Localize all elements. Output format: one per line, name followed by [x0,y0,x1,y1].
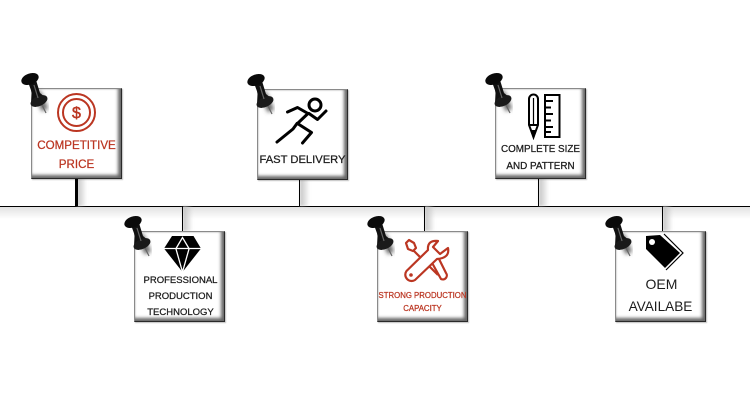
icon: runner [275,98,328,145]
connector: complete size [538,179,548,207]
icon: pin 5 [367,216,395,256]
panel: strong production capacity [377,231,468,322]
text: strong production: STRONG PRODUCTION [379,291,466,300]
connector: professional technology [182,205,192,231]
timeline shadow [0,207,750,219]
icon: pin 6 [605,216,633,256]
text: and pattern: AND PATTERN [506,161,575,172]
connector: strong capacity [424,205,434,231]
text: fast delivery: FAST DELIVERY [259,154,346,166]
panel: complete size and pattern [495,88,586,179]
connector: OEM [662,205,672,231]
panel: OEM available [615,231,706,322]
connector: fast delivery [298,180,309,207]
icon: pin 2 [247,74,275,114]
text: professional: PROFESSIONAL [144,275,217,286]
panel: competitive price [31,88,122,179]
icon: pin 1 [21,73,49,114]
text: price: PRICE [59,158,94,171]
timeline line [0,206,750,207]
icon: pencil and ruler [528,94,560,140]
icon: pin 4 [124,216,152,256]
panel: fast delivery [257,89,348,180]
icon: diamond [164,236,201,272]
text: production: PRODUCTION [149,291,212,302]
icon: wrench and screwdriver [404,238,450,282]
text: competitive: COMPETITIVE [37,139,116,152]
text: technology: TECHNOLOGY [147,307,214,318]
icon: dollar coin [57,93,96,132]
text: availabe: AVAILABE [629,299,692,314]
icon: pin 3 [485,73,513,114]
panel: professional production technology [134,231,225,322]
text: complete size: COMPLETE SIZE [501,144,580,155]
connector: competitive price [75,179,86,207]
icon: price tag [646,234,684,270]
text: OEM: OEM [646,276,677,292]
icon: dollar coin: $ [72,105,81,122]
text: capacity: CAPACITY [403,304,442,313]
